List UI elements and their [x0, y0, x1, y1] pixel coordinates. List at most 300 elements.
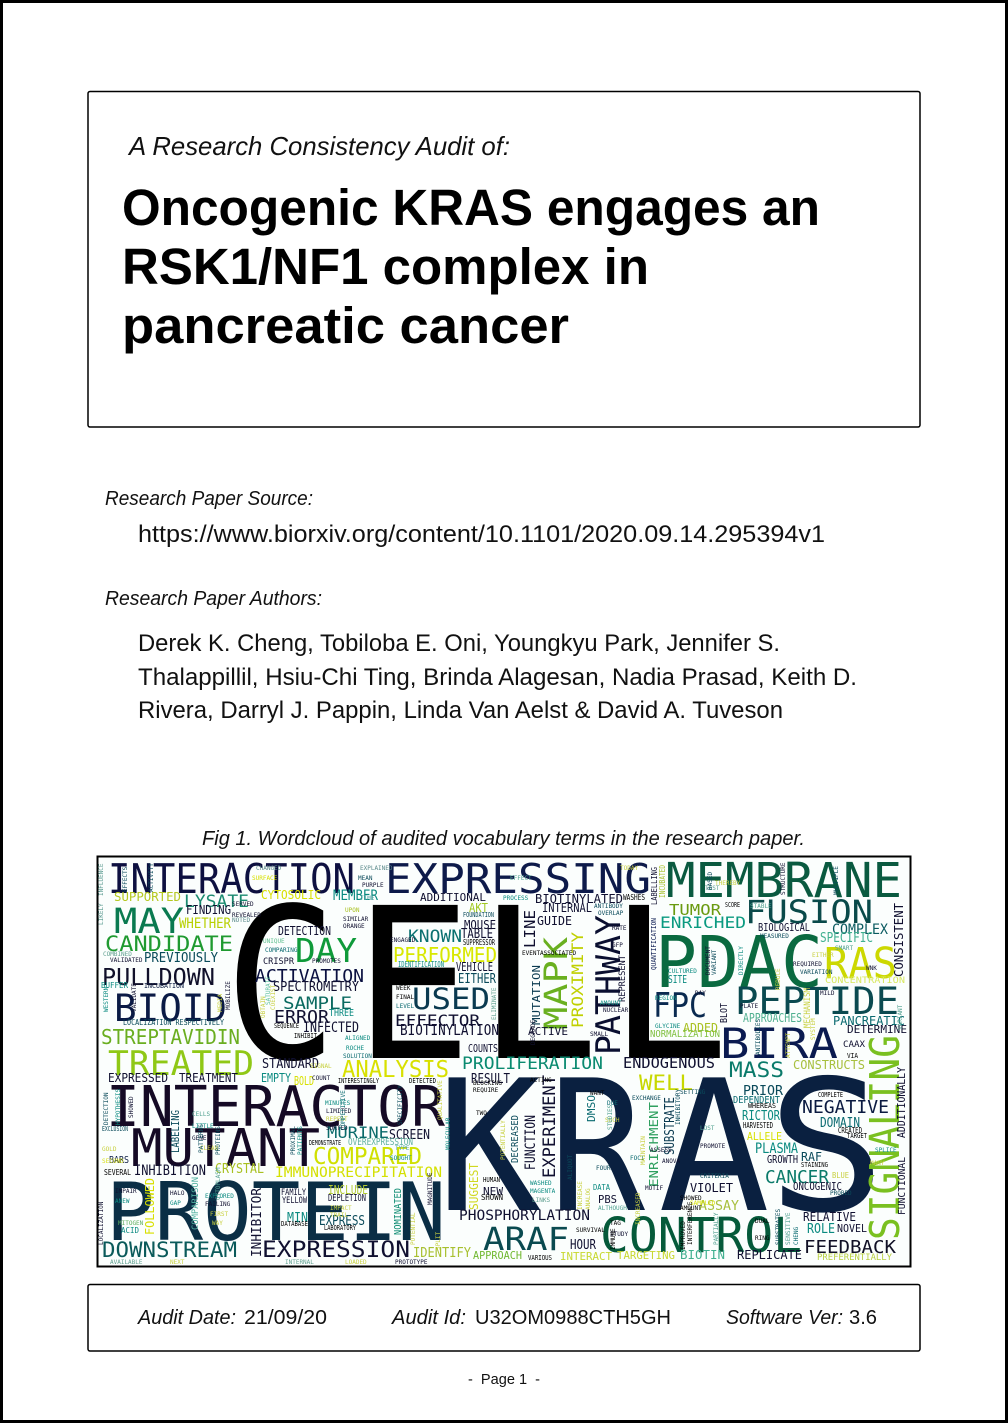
medium terms: DEPLETION	[328, 1193, 366, 1204]
medium terms: MUTATION	[530, 965, 543, 1025]
large terms: CANCER	[765, 1167, 829, 1188]
medium terms: ENRICHMENT	[647, 1102, 661, 1187]
tiny filler terms: DUAL	[755, 1218, 770, 1225]
tiny filler terms: DUE	[607, 1100, 618, 1107]
authors list: Derek K. Cheng, Tobiloba E. Oni, Youngkyu Park, Jennifer S.	[138, 630, 780, 657]
medium terms: DEMONSTRATE	[309, 1139, 341, 1147]
medium terms: DETECTED	[409, 1077, 436, 1085]
tiny filler terms: TAG	[610, 1220, 621, 1227]
medium terms: ASSAY	[699, 1199, 739, 1214]
tiny filler terms: THEREBY	[715, 880, 741, 887]
medium terms: RAF	[801, 1150, 822, 1164]
medium terms: FOLLOWED	[143, 1178, 157, 1235]
large terms: ACTIVATION	[255, 966, 364, 987]
tiny filler terms: TYPE	[395, 1145, 410, 1152]
medium terms: GROWTH	[767, 1153, 798, 1166]
tiny filler vertical terms: CYTOPLASM	[215, 1167, 222, 1200]
tiny filler terms: SPLICE	[875, 1147, 897, 1154]
medium terms: INTERNAL	[542, 901, 592, 915]
tiny filler vertical terms: ELIMINATE	[491, 987, 498, 1020]
tiny filler terms: PLATE	[740, 1003, 758, 1010]
tiny filler terms: ASSESS	[650, 1147, 672, 1154]
tiny filler vertical terms: COMPETITIVE	[340, 1090, 347, 1130]
medium terms: INCLUDE	[328, 1183, 368, 1197]
medium terms: PHOSPHORYLATION	[459, 1208, 590, 1224]
tiny filler terms: WEEK	[396, 985, 411, 992]
medium terms: DETECTION	[278, 924, 331, 938]
tiny filler terms: SURVIVAL	[576, 1227, 605, 1234]
tiny filler terms: COMPARING	[265, 947, 298, 954]
tiny filler terms: SOLUTION	[343, 1053, 372, 1060]
tiny filler terms: NUCLEAR	[603, 1007, 629, 1014]
tiny filler terms: PURPLE	[362, 882, 384, 889]
medium terms: DMSO	[585, 1095, 598, 1122]
medium terms: THREE	[329, 1008, 354, 1019]
medium terms: COMPLEX	[832, 922, 889, 938]
tiny filler vertical terms: MAINTAIN	[640, 1136, 647, 1165]
tiny filler terms: MAGENTA	[530, 1188, 556, 1195]
tiny filler terms: IMPACT	[330, 1205, 352, 1212]
medium terms: LYSATE	[184, 892, 249, 912]
tiny filler terms: GFP	[612, 942, 623, 949]
tiny filler terms: COMBINED	[103, 951, 132, 958]
large terms: PERFORMED	[393, 943, 497, 967]
tiny filler vertical terms: INHIBITORY	[675, 1088, 682, 1125]
tiny filler terms: FINAL	[396, 994, 414, 1001]
large terms: RAS	[824, 939, 897, 989]
medium terms: WHETHER	[179, 916, 231, 932]
medium terms: DETERMINE	[847, 1023, 907, 1036]
audit id: Audit Id:	[391, 1307, 466, 1329]
medium terms: SCORE	[725, 901, 740, 909]
panel: title box	[88, 92, 920, 427]
tiny filler terms: REQUIRE	[473, 1087, 499, 1094]
medium terms: INFECTED	[303, 1020, 359, 1036]
tiny filler vertical terms: SPECIFICITY	[397, 1085, 404, 1125]
medium terms: FOUNDATION	[463, 911, 494, 919]
word: KRAS: K	[437, 1041, 541, 1253]
tiny filler vertical terms: MULTIPLE	[833, 866, 840, 895]
tiny filler terms: SUCH	[605, 1117, 620, 1124]
tiny filler terms: REVEALED	[232, 912, 261, 919]
large terms: PULLDOWN	[102, 965, 215, 991]
medium terms: ADDED	[683, 1021, 718, 1035]
audit date: 21/09/20	[244, 1307, 327, 1329]
medium terms: ONCOGENIC	[793, 1180, 842, 1193]
tiny filler terms: ANOVA	[662, 1158, 680, 1165]
tiny filler terms: SERVED	[232, 901, 254, 908]
large terms: KNOWN	[408, 927, 462, 947]
tiny filler vertical terms: SATURATE	[265, 976, 272, 1005]
medium terms: OVEREXPRESSION	[348, 1137, 413, 1148]
tiny filler vertical terms: SPLIT	[435, 1232, 442, 1250]
tiny filler terms: LOADED	[345, 1259, 367, 1266]
medium terms: SUPPORTED	[114, 890, 181, 904]
medium terms: DEPENDENT	[733, 1095, 780, 1106]
large terms: TREATED	[108, 1044, 254, 1084]
large terms: BIOID	[114, 987, 227, 1030]
medium terms: PREFERENTIALLY	[817, 1253, 893, 1263]
tiny filler terms: LINKS	[532, 1197, 550, 1204]
medium terms: HARVESTED	[743, 1121, 773, 1130]
tiny filler terms: ROCHE	[346, 1045, 364, 1052]
word: KRAS	[437, 1041, 886, 1253]
tiny filler terms: VALIDATED	[110, 957, 143, 964]
tiny filler terms: CELLS	[192, 1111, 210, 1118]
tiny filler vertical terms: VARIANT	[711, 949, 718, 975]
medium terms: ACTIVE	[528, 1025, 568, 1038]
medium terms: ADDITIONALLY	[895, 1067, 908, 1138]
authors label: Research Paper Authors:	[105, 588, 322, 610]
tiny filler terms: SORTED	[326, 1125, 348, 1132]
large terms: BIRA	[720, 1019, 838, 1068]
medium terms: VIA	[847, 1052, 859, 1060]
tiny filler terms: EITHER	[812, 952, 834, 959]
tiny filler terms: DAY	[695, 990, 706, 997]
medium terms: BUFFER	[101, 981, 128, 990]
tiny filler terms: UNIQUE	[263, 938, 285, 945]
tiny filler terms: COUNT	[312, 1075, 330, 1082]
medium terms: ENDOGENOUS	[623, 1054, 715, 1072]
large terms: EXPRESSION	[262, 1238, 410, 1263]
tiny filler vertical terms: POTENTIALLY	[500, 1120, 507, 1160]
medium terms: HOUR	[570, 1238, 596, 1253]
medium terms: EXPRESSED	[108, 1071, 168, 1085]
medium terms: STANDARD	[262, 1057, 319, 1072]
tiny filler vertical terms: INTERFERENCE	[687, 1201, 694, 1245]
medium terms: SPECIFIC	[820, 931, 873, 946]
tiny filler terms: HALO	[170, 1190, 185, 1197]
medium terms: PANCREATIC	[833, 1014, 905, 1028]
medium terms: BARS	[109, 1155, 129, 1166]
medium terms: CRYSTAL	[215, 1162, 264, 1177]
tiny filler vertical terms: IMPROVED	[680, 1221, 687, 1250]
tiny filler terms: TEST	[705, 885, 720, 892]
medium terms: LABORATORY	[324, 1224, 357, 1232]
medium terms: BOLD	[294, 1074, 314, 1088]
medium terms: PBS	[598, 1193, 617, 1206]
medium terms: LINE	[521, 910, 539, 948]
tiny filler terms: EVENT	[522, 950, 540, 957]
tiny filler terms: SOUGHT	[390, 1155, 412, 1162]
tiny filler vertical terms: POTENTIAL	[410, 1212, 417, 1245]
heading: paper title	[122, 179, 820, 354]
tiny filler terms: SMALL	[590, 1031, 608, 1038]
medium terms: BIOLOGICAL	[758, 921, 810, 934]
word: MEMBRANE: MEMBRANE	[666, 853, 902, 909]
tiny filler terms: AMOUNT	[600, 1000, 622, 1007]
word: PROTEIN: PROTEIN	[106, 1166, 446, 1259]
medium terms: SCREEN	[389, 1128, 430, 1143]
tiny filler terms: ENGAGED	[390, 937, 416, 944]
medium terms: DATA	[593, 1183, 610, 1192]
large terms: ARAF	[483, 1220, 569, 1258]
word: SIGNALING: SIGNALING	[861, 1035, 909, 1240]
medium terms: IDENTIFY	[413, 1246, 471, 1261]
tiny filler terms: STUDY	[610, 1231, 628, 1238]
medium terms: APPROACH	[473, 1249, 522, 1262]
tiny filler terms: SURFACE	[252, 875, 278, 882]
medium terms: NOMINATED	[393, 1188, 404, 1235]
large terms: MASS	[729, 1058, 784, 1082]
large terms: DOWNSTREAM	[102, 1238, 237, 1262]
word: CELL: L	[477, 863, 599, 1108]
medium terms: VIOLET	[690, 1181, 733, 1195]
medium terms: SPECTROMETRY	[273, 980, 359, 995]
tiny filler vertical terms: DEGRADE	[530, 1019, 537, 1045]
authors list: Rivera, Darryl J. Pappin, Linda Van Aelst & David A. Tuveson	[138, 697, 783, 724]
large terms: ANALYSIS	[342, 1057, 449, 1083]
word: KRAS: R	[549, 1041, 645, 1253]
medium terms: BLOT	[719, 1003, 730, 1023]
word: KRAS: A	[658, 1041, 770, 1253]
tiny filler vertical terms: BASED	[707, 872, 714, 890]
large terms: MAY	[114, 902, 184, 942]
large terms: INTERACTION	[108, 855, 355, 903]
medium terms: AKT	[469, 901, 488, 915]
medium terms: SUBSTRATE	[663, 1097, 678, 1155]
tiny filler terms: REQUIRED	[793, 961, 822, 968]
authors list	[138, 630, 857, 724]
tiny filler terms: NOTED	[232, 917, 250, 924]
tiny filler terms: GOLD	[102, 1146, 117, 1153]
medium terms: SUGGEST	[467, 1163, 481, 1210]
large terms: STREPTAVIDIN	[101, 1025, 240, 1049]
large terms: TUMOR	[669, 901, 722, 919]
medium terms: QUANTIFICATION	[650, 918, 658, 970]
tiny filler vertical terms: STRUCTURE	[780, 862, 787, 895]
tiny filler vertical terms: DETECTION	[103, 1092, 110, 1125]
tiny filler terms: ANTIBODY	[594, 903, 623, 910]
medium terms: LABELING	[169, 1110, 182, 1153]
tiny filler vertical terms: CHENG	[793, 1227, 800, 1245]
tiny filler terms: RING	[755, 1235, 770, 1242]
tiny filler terms	[102, 865, 897, 1266]
tiny filler terms: MANY	[870, 1160, 885, 1167]
medium terms: CRISPR	[263, 957, 295, 967]
medium terms: EMPTY	[261, 1071, 292, 1085]
large terms: PEPTIDE	[735, 980, 899, 1023]
tiny filler vertical terms: IMMUNE	[610, 1228, 617, 1250]
tiny filler vertical terms: PATIENTS	[297, 1126, 304, 1155]
tiny filler vertical terms: INCREASE	[577, 1181, 584, 1210]
medium terms: RESULT	[471, 1072, 510, 1087]
large terms: EFFECTOR	[395, 1011, 480, 1030]
tiny filler vertical terms: PROTEINS	[215, 1126, 222, 1155]
tiny filler vertical terms: HYPOTHESIS	[115, 1088, 122, 1125]
software version: Software Ver:	[726, 1307, 843, 1329]
medium terms: NEW	[483, 1185, 503, 1198]
medium terms: LABELLING	[650, 867, 659, 905]
medium terms: VEHICLE	[456, 960, 493, 974]
medium terms: RELATIVE	[803, 1210, 856, 1224]
tiny filler terms: EFFECT	[510, 875, 532, 882]
tiny filler vertical terms: MOBILIZE	[225, 981, 232, 1010]
medium terms: LOCALIZATION RESPECTIVELY	[123, 1018, 224, 1027]
medium terms: CONSISTENT	[892, 903, 906, 977]
word: CELL	[224, 863, 729, 1108]
medium terms: SITE	[668, 973, 687, 986]
medium terms: INHIBITOR	[250, 1188, 265, 1257]
tiny filler terms: PROMOTES	[312, 958, 341, 965]
tiny filler vertical terms: DOCUMENT	[705, 946, 712, 975]
tiny filler terms: GAP	[170, 1200, 181, 1207]
tiny filler vertical terms: WESTERN	[103, 986, 110, 1012]
tiny filler terms: STABLE	[750, 903, 772, 910]
tiny filler vertical terms: MOLECULAR	[445, 1117, 452, 1150]
medium terms: PRIOR	[743, 1084, 783, 1099]
tiny filler terms: INTERNAL	[285, 1259, 314, 1266]
tiny filler vertical terms: MAGNITUDE	[427, 1172, 434, 1205]
tiny filler terms: AVAILABLE	[110, 1259, 143, 1266]
tiny filler vertical terms: COEXIST	[270, 984, 277, 1010]
panel: audit footer	[88, 1284, 920, 1351]
tiny filler terms: MINUTES	[325, 1100, 351, 1107]
tiny filler terms: UPON	[345, 907, 360, 914]
large terms: PROXIMITY	[568, 932, 587, 1028]
medium terms: REPRESENT	[618, 954, 628, 1002]
tiny filler terms: LITTLE	[192, 1123, 214, 1130]
tiny filler vertical terms: EFFECTS	[122, 866, 129, 892]
tiny filler terms: REPEAT	[326, 1116, 348, 1123]
tiny filler terms: PROMOTE	[700, 1143, 726, 1150]
word: MUTANT: MUTANT	[131, 1119, 320, 1179]
large terms: CANDIDATE	[105, 932, 233, 956]
large terms: SAMPLE	[283, 994, 352, 1014]
tiny filler vertical terms: DIRECTLY	[738, 946, 745, 975]
medium terms: CAAX	[843, 1040, 866, 1050]
tiny filler terms: FOUR	[596, 1165, 611, 1172]
medium terms: BLUE	[832, 1171, 849, 1180]
large terms: BIOTINYLATION	[400, 1021, 499, 1039]
medium terms: DATABASE	[281, 1220, 308, 1228]
large terms: NEGATIVE	[802, 1097, 889, 1118]
tiny filler terms: EXPLORED	[205, 1193, 234, 1200]
medium terms: PLASMA	[755, 1141, 798, 1157]
page number: - Page 1 -	[468, 1371, 540, 1388]
tiny filler terms: CLEAN	[200, 1145, 218, 1152]
medium terms: COUNTS	[468, 1042, 498, 1055]
tiny filler vertical terms: SENSITIVE	[785, 1212, 792, 1245]
tiny filler vertical terms: ATTEMPT	[785, 1032, 792, 1058]
medium terms: SEQUENCE	[274, 1022, 299, 1030]
large terms: IMMUNOPRECIPITATION	[275, 1165, 442, 1181]
tiny filler terms: ANEW	[115, 1198, 130, 1205]
tiny filler vertical terms: MEDIA	[217, 994, 224, 1012]
figure caption: Fig 1. Wordcloud of audited vocabulary terms in the research paper.	[202, 828, 805, 850]
tiny filler terms: BLOCKING	[473, 1080, 502, 1087]
tiny filler vertical terms: STUDIES	[607, 1104, 614, 1130]
word: PDAC: PDAC	[655, 921, 823, 1004]
tiny filler terms: WAY	[212, 1220, 223, 1227]
medium terms: VARIOUS	[528, 1254, 552, 1262]
medium terms: WASHES	[623, 893, 645, 902]
tiny filler terms: FOCI	[630, 1155, 645, 1162]
tiny filler terms: ORANGE	[343, 923, 365, 930]
tiny filler terms: MOTIF	[645, 1185, 663, 1192]
tiny filler terms: ASSOCIATED	[540, 950, 577, 957]
medium terms	[101, 865, 908, 1263]
audit date: Audit Date:	[137, 1307, 236, 1329]
large terms: WELL	[639, 1071, 693, 1095]
tiny filler terms: CULTURED	[668, 968, 697, 975]
medium terms: SEVERAL	[104, 1168, 131, 1177]
medium terms: FAMILY	[281, 1188, 306, 1198]
tiny filler terms: LEVEL	[396, 1003, 414, 1010]
tiny filler terms: TIME	[360, 895, 375, 902]
medium terms: HUMAN	[483, 1176, 500, 1184]
tiny filler vertical terms: LOCALIZATION	[98, 1201, 105, 1245]
large terms	[101, 855, 899, 1263]
audit id: U32OM0988CTH5GH	[475, 1307, 671, 1329]
tiny filler vertical terms: PARTIALLY	[713, 1212, 720, 1245]
tiny filler terms: NEXT	[170, 1259, 185, 1266]
tiny filler vertical terms: INFLUENCE	[98, 863, 105, 896]
tiny filler terms: VARIATION	[800, 969, 833, 976]
medium terms: COMPARISON	[191, 1177, 201, 1230]
tiny filler vertical terms: PROXIMAL	[290, 1126, 297, 1155]
medium terms: CYTOSOLIC	[261, 888, 321, 902]
chart: wordcloud	[98, 853, 910, 1266]
medium terms: EXCLUSION	[102, 1125, 128, 1133]
tiny filler terms: WASHED	[530, 1180, 552, 1187]
tiny filler vertical terms: ANALOG	[585, 1188, 592, 1210]
tiny filler terms: TWO	[476, 1110, 487, 1117]
medium terms: GUIDE	[537, 914, 572, 928]
medium terms: INTERACT	[560, 1250, 612, 1263]
large terms: EXPERIMENT	[540, 1075, 560, 1178]
tiny filler terms: RATE	[612, 925, 627, 932]
tiny filler vertical terms: LIKELY	[98, 903, 105, 925]
tiny filler terms: CHANGED	[256, 865, 282, 872]
medium terms: ALLELE	[747, 1130, 782, 1143]
tiny filler vertical terms	[98, 862, 904, 1250]
tiny filler vertical terms: ANTIBODIES	[755, 1018, 762, 1055]
large terms: COMPARED	[313, 1144, 422, 1170]
large terms: PROLIFERATION	[462, 1054, 603, 1074]
large terms: EXPRESSING	[385, 855, 651, 903]
tiny filler terms: SAMPLED	[690, 1200, 716, 1207]
large terms: USED	[412, 982, 490, 1016]
tiny filler terms: LOST	[700, 1125, 715, 1132]
tiny filler vertical terms: SHOWED	[128, 1096, 135, 1118]
tiny filler terms: PROBED	[830, 1190, 852, 1197]
large terms: MURINE	[327, 1123, 389, 1142]
medium terms: YELLOW	[282, 1196, 307, 1206]
medium terms: INHIBIT	[294, 1032, 318, 1040]
tiny filler terms: PROCESS	[503, 895, 529, 902]
word: CONTROL: CONTROL	[600, 1208, 802, 1264]
tiny filler vertical terms: INCREASED	[635, 1192, 642, 1225]
medium terms: DECREASED	[510, 1115, 521, 1163]
medium terms: ADDITIONAL	[420, 891, 486, 904]
tiny filler terms: ACTING	[530, 1077, 552, 1084]
tiny filler vertical terms: REDUCE	[775, 968, 782, 990]
tiny filler terms: EXCHANGE	[632, 1095, 661, 1102]
medium terms: INHIBITION	[134, 1163, 206, 1179]
tiny filler terms: FIRST	[210, 1211, 228, 1218]
tiny filler terms: REGION	[655, 995, 677, 1002]
medium terms: INCUBATED	[658, 865, 667, 898]
medium terms: BIOTINYLATED	[535, 892, 623, 906]
tiny filler terms: IMPAIR	[115, 1188, 137, 1195]
tiny filler terms: MEAN	[358, 875, 373, 882]
word: PATHWAY: PATHWAY	[589, 915, 629, 1055]
medium terms: COMPLETE	[818, 1091, 843, 1099]
medium terms: INCUBATION	[144, 982, 184, 990]
medium terms: DOMAIN	[820, 1116, 860, 1131]
source url: https://www.biorxiv.org/content/10.1101/2020.09.14.295394v1	[138, 521, 825, 548]
